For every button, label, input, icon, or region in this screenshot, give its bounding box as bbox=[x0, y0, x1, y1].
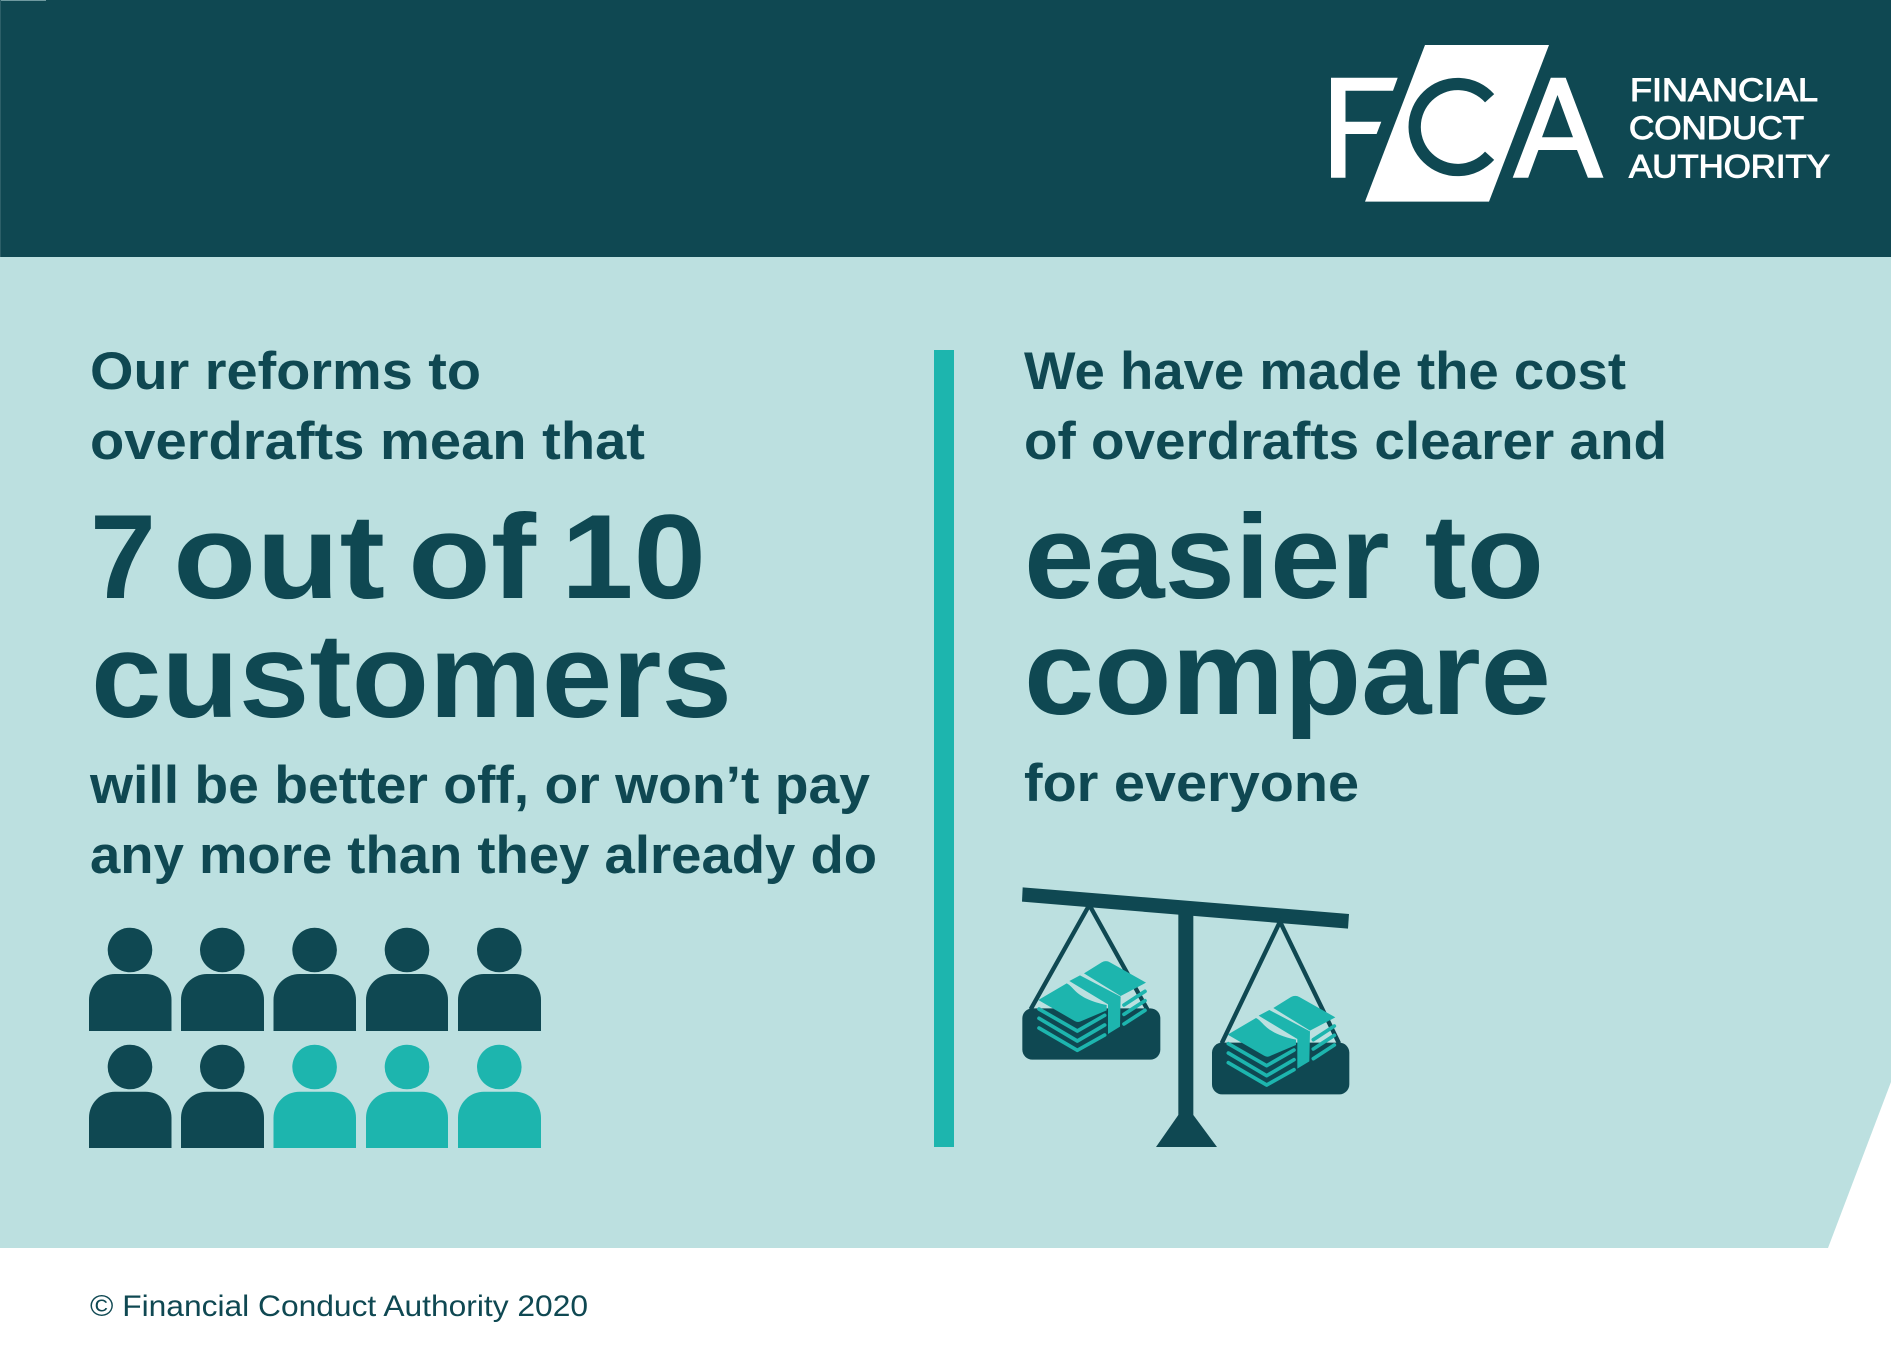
left headline: out bbox=[173, 490, 385, 624]
left intro text: Our reforms to bbox=[90, 342, 481, 401]
logo wordmark: FINANCIAL bbox=[1630, 72, 1818, 108]
light background panel bbox=[0, 257, 1891, 1248]
icon: balance scale with money bbox=[1022, 887, 1349, 1147]
left follow-on text bbox=[89, 756, 877, 885]
person 1 bbox=[89, 928, 172, 1031]
money stack right bbox=[1228, 996, 1335, 1085]
person 7 bbox=[181, 1045, 264, 1148]
left headline bbox=[90, 490, 732, 743]
right follow-on text: for everyone bbox=[1024, 754, 1359, 813]
logo letter F bbox=[1331, 78, 1398, 178]
right headline: compare bbox=[1024, 606, 1551, 740]
right pan and strings bbox=[1212, 922, 1349, 1094]
left headline: of bbox=[408, 490, 537, 624]
right headline: easier to bbox=[1024, 490, 1544, 624]
logo letter A bbox=[1513, 78, 1604, 178]
footer copyright: © Financial Conduct Authority 2020 bbox=[90, 1290, 588, 1323]
person 9 bbox=[366, 1045, 448, 1148]
left headline: 10 bbox=[561, 490, 706, 624]
money stack left bbox=[1038, 961, 1146, 1050]
left follow-on text: any more than they already do bbox=[90, 826, 877, 885]
right intro text: We have made the cost bbox=[1024, 342, 1626, 401]
logo wordmark: AUTHORITY bbox=[1629, 148, 1830, 184]
person 2 bbox=[181, 928, 264, 1031]
logo wordmark bbox=[1629, 72, 1830, 184]
left headline: customers bbox=[91, 609, 732, 743]
person 4 bbox=[366, 928, 448, 1031]
logo parallelogram bbox=[1365, 45, 1549, 202]
left follow-on text: will be better off, or won’t pay bbox=[89, 756, 871, 815]
left intro text: overdrafts mean that bbox=[90, 412, 645, 471]
left pan and strings bbox=[1022, 905, 1160, 1060]
person 3 bbox=[274, 928, 356, 1031]
left headline: 7 bbox=[90, 490, 156, 624]
right headline bbox=[1024, 490, 1551, 740]
right intro text bbox=[1024, 342, 1667, 471]
left intro text bbox=[90, 342, 645, 471]
logo letter C bbox=[1415, 84, 1490, 170]
vertical teal divider bbox=[934, 350, 954, 1147]
logo wordmark: CONDUCT bbox=[1629, 110, 1804, 146]
right intro text: of overdrafts clearer and bbox=[1024, 412, 1667, 471]
person 8 bbox=[274, 1045, 356, 1148]
person 10 bbox=[458, 1045, 541, 1148]
person 5 bbox=[458, 928, 541, 1031]
FCA logo bbox=[1331, 45, 1830, 202]
person 6 bbox=[89, 1045, 172, 1148]
scale beam, post and base bbox=[1022, 887, 1349, 1147]
header band bbox=[0, 0, 1891, 257]
people pictogram: 7 of 10 bbox=[89, 928, 541, 1148]
